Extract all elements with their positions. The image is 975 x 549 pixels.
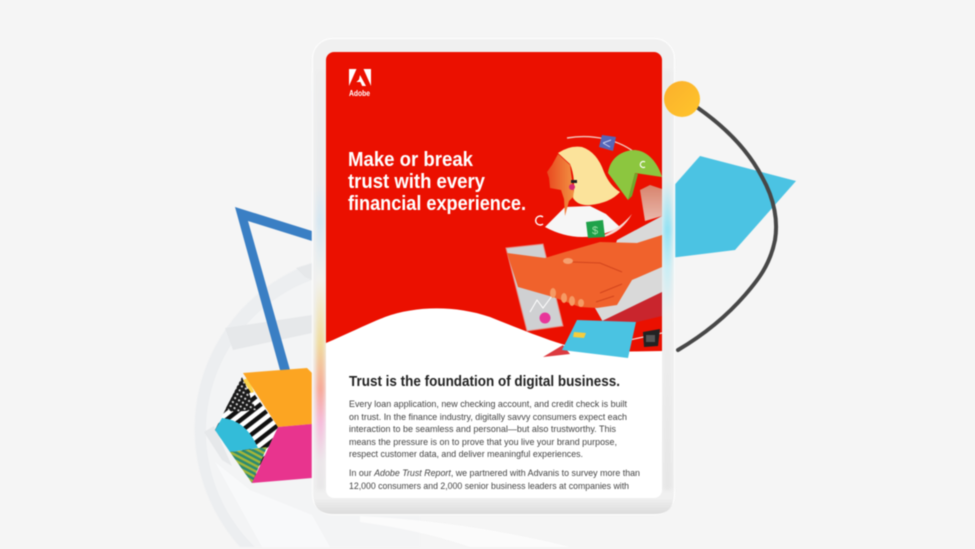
cube: cyan segment [215, 418, 258, 452]
Adobe logo [349, 69, 371, 98]
body copy [349, 399, 640, 492]
earring [569, 184, 575, 190]
body copy: In our Adobe Trust Report, we partnered with Advanis to survey more than [349, 468, 640, 479]
icon: purple network square [599, 135, 616, 151]
blue triangle outline [235, 207, 312, 370]
section heading: Trust is the foundation of digital business. [349, 373, 620, 390]
cyan polygon [670, 156, 796, 258]
cube: pink face [252, 424, 312, 483]
Adobe logo: Adobe [349, 89, 370, 98]
icon: green dollar note [586, 220, 605, 238]
spiral staircase backdrop [195, 263, 570, 547]
icon: cyan credit card [562, 320, 636, 358]
cube: patterned left face [215, 377, 278, 483]
icon: dark QR square [643, 329, 660, 347]
body copy: 12,000 consumers and 2,000 senior business leaders at companies with [349, 481, 629, 492]
body copy: interaction to be seamless and personal—but also trustworthy. This [349, 424, 616, 435]
illustration: woman portrait [536, 147, 632, 237]
tablet screen [326, 52, 662, 498]
body copy: on trust. In the finance industry, digitally savvy consumers expect each [349, 412, 627, 423]
tablet frame [312, 38, 675, 515]
hero headline: trust with every [348, 171, 486, 193]
illustration: connector line [625, 333, 662, 341]
illustration: grey device behind hands [595, 216, 662, 322]
illustration: grey phone [506, 244, 563, 331]
body copy: Every loan application, new checking account, and credit check is built [349, 399, 627, 410]
hero headline: Make or break [348, 149, 474, 171]
illustration: clasped hands [507, 235, 662, 308]
small ring icon [536, 216, 543, 225]
hair [558, 147, 620, 205]
illustration: red fold under card [543, 345, 570, 357]
red hero panel with wave [326, 52, 662, 352]
icon: green dollar note: $ [592, 225, 598, 237]
cube: green wave segment [230, 447, 267, 483]
yellow circle [664, 81, 700, 117]
shirt [545, 206, 620, 237]
dark brush curve [678, 108, 776, 350]
infographic canvas [196, 51, 796, 546]
illustration: orbit arc [566, 135, 633, 151]
hero headline: financial experience. [348, 193, 526, 215]
illustration: peach block [640, 185, 662, 221]
neck and face [547, 154, 574, 216]
patterned cube [215, 368, 312, 483]
hero headline [348, 149, 526, 215]
cube: orange face [243, 368, 312, 427]
body copy: respect customer data, and deliver meaningful experiences. [349, 449, 583, 460]
icon: green pie [608, 150, 662, 200]
body copy: means the pressure is on to prove that you live your brand purpose, [349, 437, 617, 448]
